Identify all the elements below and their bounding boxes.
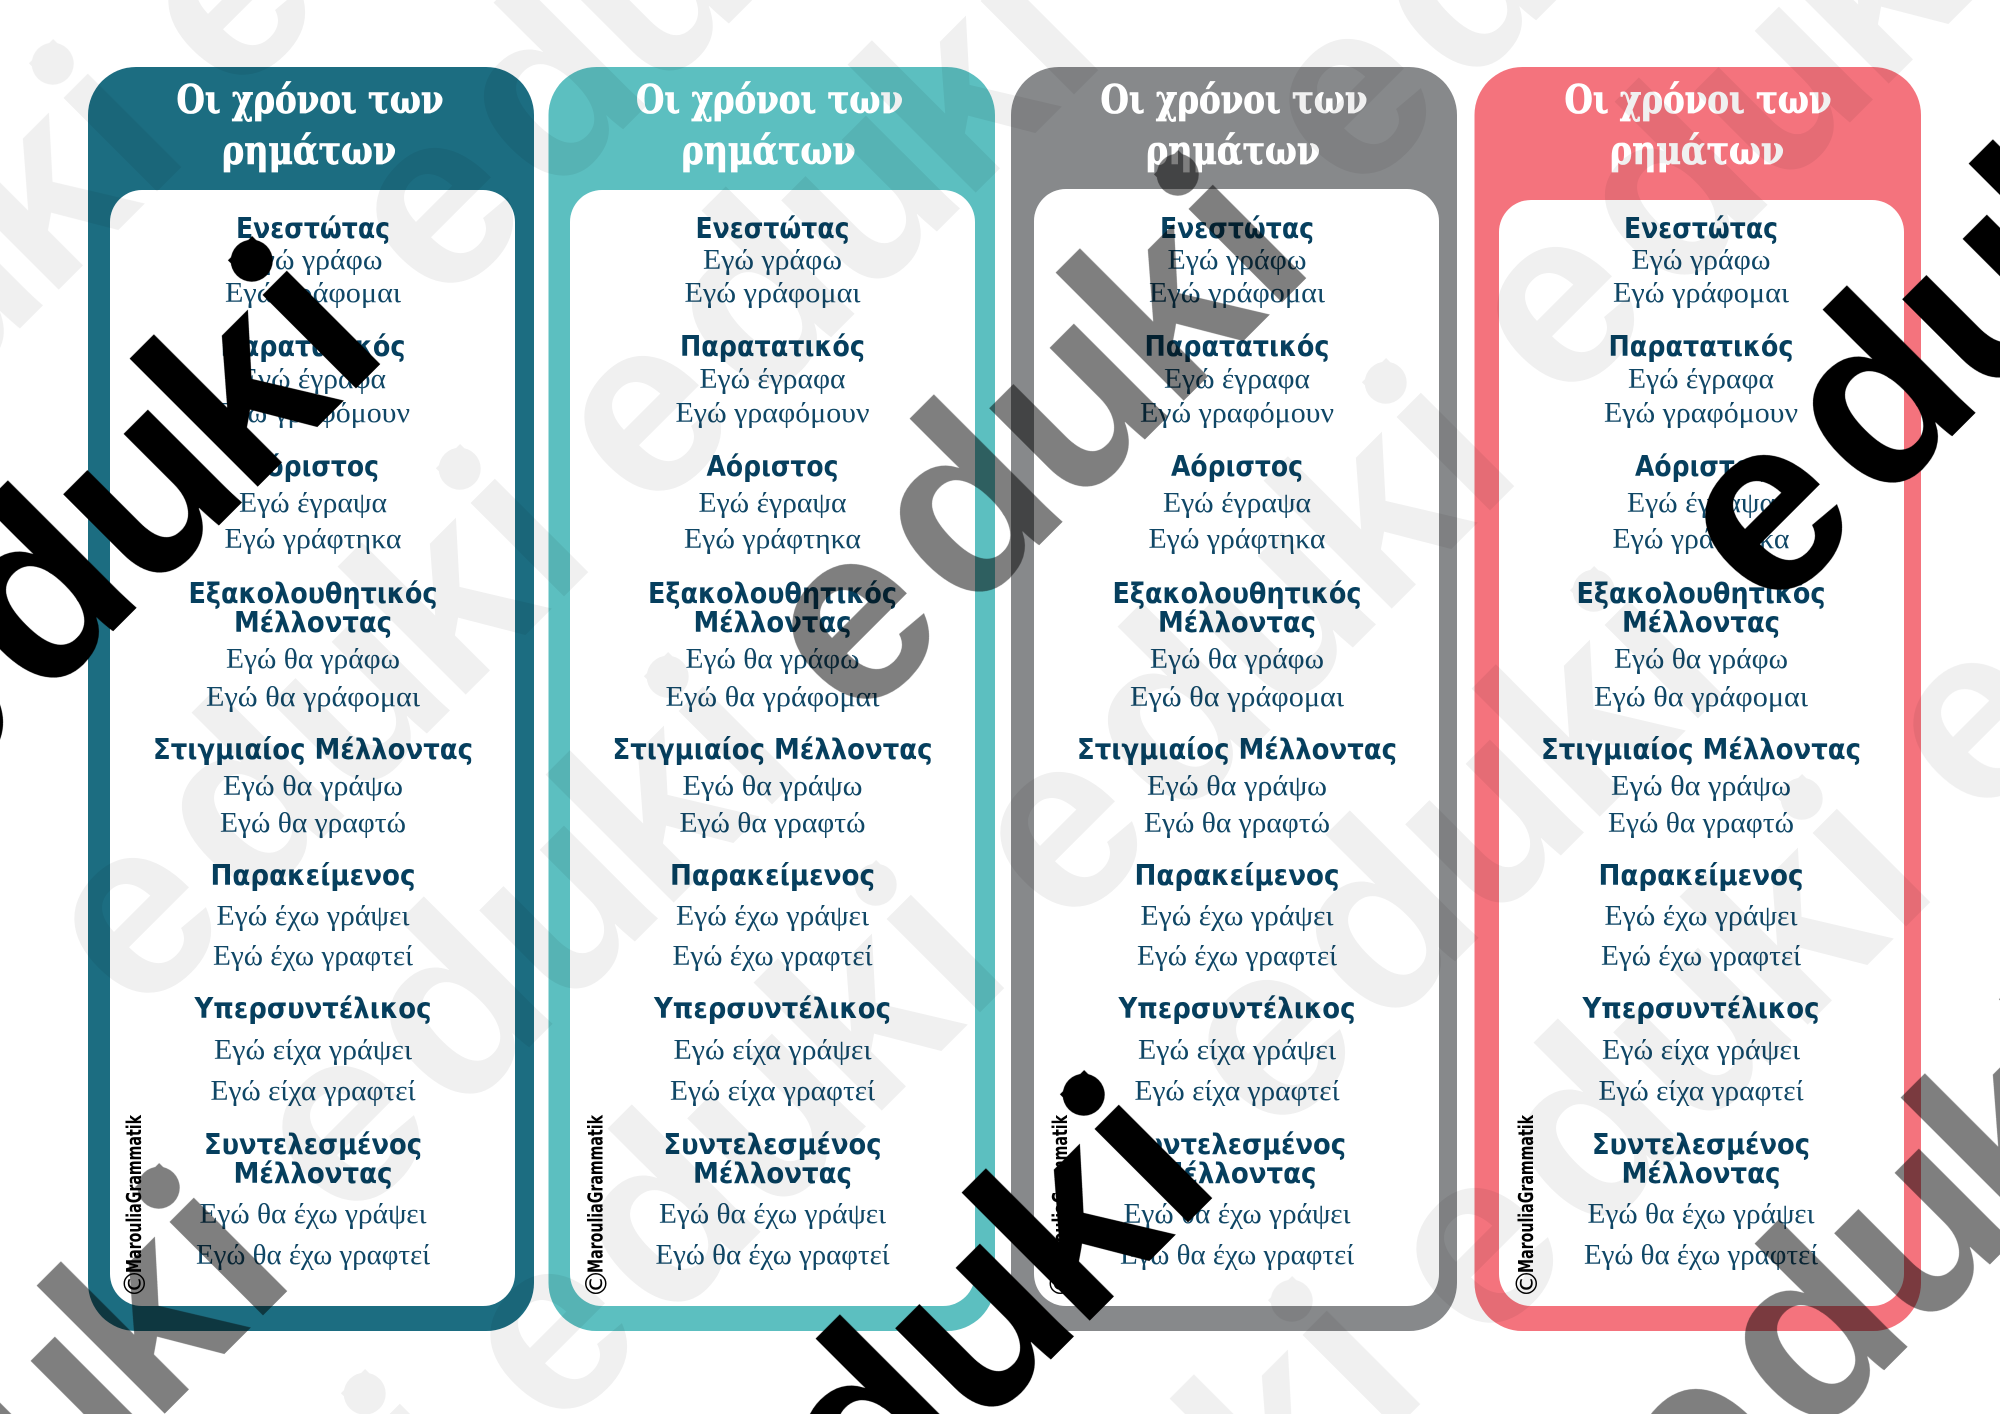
tense: aorist <box>1612 450 1790 555</box>
tense: continuous future: Μέλλοντας <box>694 606 852 639</box>
tense: perfect: Εγώ έχω γραφτεί <box>1137 941 1337 972</box>
tense: future perfect: Εγώ θα έχω γραφτεί <box>196 1240 430 1271</box>
title: Οι χρόνοι των <box>176 77 444 123</box>
turquoise frame <box>548 67 995 1331</box>
tense: imperfect: Εγώ έγραφα <box>1164 364 1310 395</box>
tense: future perfect: Εγώ θα έχω γράψει <box>200 1199 427 1230</box>
credit: © <box>1510 1269 1544 1298</box>
title: ρημάτων <box>222 128 396 174</box>
tense: simple future <box>612 733 932 839</box>
tense: pluperfect: Εγώ είχα γραφτεί <box>1598 1076 1804 1107</box>
tense: continuous future <box>1112 577 1362 713</box>
turquoise inner card <box>570 190 975 1306</box>
panel: grey bookmark <box>1011 67 1457 1331</box>
pink bookmark content <box>1510 77 1861 1298</box>
tense: simple future: Στιγμιαίος Μέλλοντας <box>612 733 932 766</box>
credit: MarouliaGrammatik <box>1514 1115 1538 1273</box>
tense: perfect: Εγώ έχω γράψει <box>216 901 410 932</box>
light watermark pattern: eduki <box>905 314 1564 973</box>
tense: imperfect: Παρατατικός <box>680 330 865 363</box>
panel: pink bookmark <box>1474 67 1921 1331</box>
tense: pluperfect: Υπερσυντέλικος <box>1118 992 1356 1025</box>
tense: imperfect: Εγώ έγραφα <box>240 364 386 395</box>
tense: perfect <box>670 859 875 972</box>
tense: simple future: Εγώ θα γραφτώ <box>220 808 406 839</box>
tense: simple future: Εγώ θα γράψω <box>1147 771 1327 802</box>
panel: teal bookmark <box>88 67 534 1331</box>
tense: perfect: Παρακείμενος <box>670 859 875 892</box>
tense: imperfect <box>1604 330 1798 429</box>
tense: imperfect: Παρατατικός <box>1608 330 1794 363</box>
tense: simple future <box>1077 733 1397 839</box>
credit: MarouliaGrammatik <box>122 1115 146 1273</box>
title: ρημάτων <box>1146 128 1320 174</box>
tense: pluperfect: Εγώ είχα γραφτεί <box>210 1076 416 1107</box>
tense: aorist: Αόριστος <box>706 450 838 483</box>
tense: future perfect: Εγώ θα έχω γραφτεί <box>1584 1240 1818 1271</box>
light watermark pattern: eduki <box>1113 522 1772 1181</box>
tense: imperfect: Παρατατικός <box>1144 330 1330 363</box>
tense: imperfect: Εγώ γραφόμουν <box>1140 398 1334 429</box>
teal inner card <box>110 190 515 1306</box>
tense: future perfect <box>656 1128 890 1271</box>
tense: aorist <box>1148 450 1326 555</box>
tense: aorist: Εγώ γράφτηκα <box>1148 524 1326 555</box>
panel: turquoise bookmark <box>548 67 995 1331</box>
light watermark pattern: eduki <box>187 608 846 1267</box>
tense: continuous future: Μέλλοντας <box>234 606 392 639</box>
teal frame <box>88 67 534 1331</box>
tense: perfect: Εγώ έχω γράψει <box>1140 901 1334 932</box>
tense: perfect <box>1134 859 1340 972</box>
tense: perfect: Παρακείμενος <box>1134 859 1340 892</box>
title: Οι χρόνοι των <box>1564 77 1832 123</box>
tense: pluperfect <box>1118 992 1356 1107</box>
tense: pluperfect: Εγώ είχα γραφτεί <box>1134 1076 1340 1107</box>
light watermark pattern: eduki <box>1321 730 1980 1389</box>
tense: simple future: Εγώ θα γράψω <box>682 771 862 802</box>
tense: imperfect: Παρατατικός <box>220 330 406 363</box>
tense: present: Εγώ γράφω <box>244 245 382 276</box>
tense: imperfect <box>676 330 870 429</box>
tense: future perfect: Συντελεσμένος <box>664 1128 882 1161</box>
tense: simple future: Εγώ θα γραφτώ <box>680 808 866 839</box>
pink inner card <box>1499 200 1904 1306</box>
tense: continuous future <box>1576 577 1826 713</box>
tense: pluperfect: Εγώ είχα γράψει <box>1138 1035 1336 1066</box>
tense: continuous future: Εγώ θα γράφομαι <box>206 682 420 713</box>
tense: simple future: Στιγμιαίος Μέλλοντας <box>1077 733 1397 766</box>
tense: continuous future: Εγώ θα γράφομαι <box>1130 682 1344 713</box>
tense: continuous future: Εγώ θα γράφομαι <box>1594 682 1808 713</box>
tense: perfect: Εγώ έχω γραφτεί <box>1601 941 1801 972</box>
tense: pluperfect: Υπερσυντέλικος <box>653 992 891 1025</box>
tense: perfect: Εγώ έχω γραφτεί <box>213 941 413 972</box>
tense: continuous future: Εγώ θα γράφω <box>1614 644 1788 675</box>
credit <box>580 1115 614 1298</box>
tense: perfect: Εγώ έχω γράψει <box>676 901 869 932</box>
tense: pluperfect <box>194 992 432 1107</box>
tense: pluperfect <box>653 992 891 1107</box>
tense: aorist: Εγώ γράφτηκα <box>684 524 861 555</box>
credit: MarouliaGrammatik <box>1048 1115 1072 1273</box>
title: Οι χρόνοι των <box>636 77 903 123</box>
tense: future perfect: Εγώ θα έχω γράψει <box>659 1199 886 1230</box>
tense: imperfect <box>1140 330 1334 429</box>
title <box>176 77 444 174</box>
grey bookmark content <box>1044 77 1397 1298</box>
tense: continuous future <box>188 577 438 713</box>
tense: pluperfect: Εγώ είχα γράψει <box>674 1035 872 1066</box>
tense: pluperfect: Εγώ είχα γραφτεί <box>670 1076 875 1107</box>
tense: present: Εγώ γράφω <box>703 245 842 276</box>
tense: simple future: Εγώ θα γράψω <box>223 771 403 802</box>
tense: present: Εγώ γράφομαι <box>225 278 402 309</box>
tense: aorist: Εγώ έγραψα <box>1627 488 1775 519</box>
tense: aorist: Εγώ έγραψα <box>698 488 847 519</box>
tense: continuous future <box>648 577 897 713</box>
tense: present: Ενεστώτας <box>1624 212 1778 245</box>
title: ρημάτων <box>1610 128 1784 174</box>
tense: aorist: Εγώ έγραψα <box>239 488 387 519</box>
tense: perfect <box>1598 859 1804 972</box>
tense: continuous future: Εξακολουθητικός <box>1576 577 1826 610</box>
tense: pluperfect: Εγώ είχα γράψει <box>214 1035 412 1066</box>
tense: imperfect <box>216 330 410 429</box>
tense: pluperfect: Εγώ είχα γράψει <box>1602 1035 1800 1066</box>
tense: present: Ενεστώτας <box>1160 212 1314 245</box>
tense: continuous future: Μέλλοντας <box>1622 606 1780 639</box>
tense: future perfect: Μέλλοντας <box>1622 1157 1780 1190</box>
tense: continuous future: Εγώ θα γράφομαι <box>666 682 880 713</box>
tense: imperfect: Εγώ γραφόμουν <box>216 398 410 429</box>
grey inner card <box>1034 189 1439 1306</box>
title <box>1100 77 1368 174</box>
tense: aorist: Εγώ γράφτηκα <box>1612 524 1790 555</box>
tense: present: Εγώ γράφομαι <box>1613 278 1790 309</box>
tense: simple future: Στιγμιαίος Μέλλοντας <box>1541 733 1861 766</box>
tense: perfect <box>210 859 416 972</box>
tense: present: Εγώ γράφω <box>1632 245 1770 276</box>
tense: continuous future: Εγώ θα γράφω <box>1150 644 1324 675</box>
turquoise bookmark content <box>580 77 932 1298</box>
tense: aorist: Εγώ γράφτηκα <box>224 524 402 555</box>
tense: future perfect: Συντελεσμένος <box>1128 1128 1346 1161</box>
title: ρημάτων <box>682 128 856 174</box>
tense: future perfect: Εγώ θα έχω γράψει <box>1124 1199 1351 1230</box>
tense: present: Ενεστώτας <box>236 212 390 245</box>
pink frame <box>1474 67 1921 1331</box>
tense: pluperfect <box>1582 992 1820 1107</box>
tense: aorist: Εγώ έγραψα <box>1163 488 1311 519</box>
tense: present <box>684 212 861 309</box>
teal bookmark content <box>118 77 473 1298</box>
tense: future perfect <box>196 1128 430 1271</box>
credit: MarouliaGrammatik <box>584 1115 608 1273</box>
tense: future perfect: Συντελεσμένος <box>204 1128 422 1161</box>
credit <box>1044 1115 1078 1298</box>
title <box>636 77 903 174</box>
tense: future perfect: Μέλλοντας <box>693 1157 852 1190</box>
tense: aorist <box>684 450 861 555</box>
tense: present <box>225 212 402 309</box>
tense: future perfect: Εγώ θα έχω γραφτεί <box>1120 1240 1354 1271</box>
tense: aorist: Αόριστος <box>247 450 379 483</box>
tense: perfect: Εγώ έχω γραφτεί <box>672 941 873 972</box>
credit <box>1510 1115 1544 1298</box>
tense: future perfect: Μέλλοντας <box>234 1157 392 1190</box>
tense: aorist: Αόριστος <box>1635 450 1767 483</box>
tense: simple future: Εγώ θα γραφτώ <box>1144 808 1330 839</box>
tense: simple future: Εγώ θα γράψω <box>1611 771 1791 802</box>
tense: future perfect: Μέλλοντας <box>1158 1157 1316 1190</box>
tense: imperfect: Εγώ έγραφα <box>700 364 846 395</box>
tense: pluperfect: Υπερσυντέλικος <box>1582 992 1820 1025</box>
tense: future perfect: Εγώ θα έχω γραφτεί <box>656 1240 890 1271</box>
credit: © <box>1044 1269 1078 1298</box>
tense: present: Εγώ γράφομαι <box>1149 278 1326 309</box>
tense: continuous future: Εξακολουθητικός <box>1112 577 1362 610</box>
tense: continuous future: Εξακολουθητικός <box>188 577 438 610</box>
tense: imperfect: Εγώ έγραφα <box>1628 364 1774 395</box>
tense: continuous future: Εγώ θα γράφω <box>226 644 400 675</box>
tense: future perfect <box>1120 1128 1354 1271</box>
tense: future perfect: Εγώ θα έχω γράψει <box>1588 1199 1815 1230</box>
tense: imperfect: Εγώ γραφόμουν <box>1604 398 1798 429</box>
tense: aorist <box>224 450 402 555</box>
tense: aorist: Αόριστος <box>1171 450 1303 483</box>
tense: simple future <box>153 733 473 839</box>
tense: continuous future: Εγώ θα γράφω <box>686 644 860 675</box>
tense: simple future: Στιγμιαίος Μέλλοντας <box>153 733 473 766</box>
tense: perfect: Εγώ έχω γράψει <box>1604 901 1798 932</box>
grey frame <box>1011 67 1457 1331</box>
credit: © <box>118 1269 152 1298</box>
tense: present <box>1613 212 1790 309</box>
tense: continuous future: Μέλλοντας <box>1158 606 1316 639</box>
tense: present: Εγώ γράφομαι <box>684 278 861 309</box>
credit <box>118 1115 152 1298</box>
tense: simple future: Εγώ θα γραφτώ <box>1608 808 1794 839</box>
tense: imperfect: Εγώ γραφόμουν <box>676 398 870 429</box>
tense: present: Ενεστώτας <box>696 212 850 245</box>
credit: © <box>580 1269 614 1298</box>
tense: perfect: Παρακείμενος <box>210 859 416 892</box>
grey watermark: centre: eduki <box>697 106 1356 765</box>
tense: future perfect <box>1584 1128 1818 1271</box>
tense: simple future <box>1541 733 1861 839</box>
tense: present <box>1149 212 1326 309</box>
tense: continuous future: Εξακολουθητικός <box>648 577 897 610</box>
tense: perfect: Παρακείμενος <box>1598 859 1804 892</box>
tense: pluperfect: Υπερσυντέλικος <box>194 992 432 1025</box>
tense: present: Εγώ γράφω <box>1168 245 1306 276</box>
title: Οι χρόνοι των <box>1100 77 1368 123</box>
tense: future perfect: Συντελεσμένος <box>1592 1128 1810 1161</box>
title <box>1564 77 1832 174</box>
